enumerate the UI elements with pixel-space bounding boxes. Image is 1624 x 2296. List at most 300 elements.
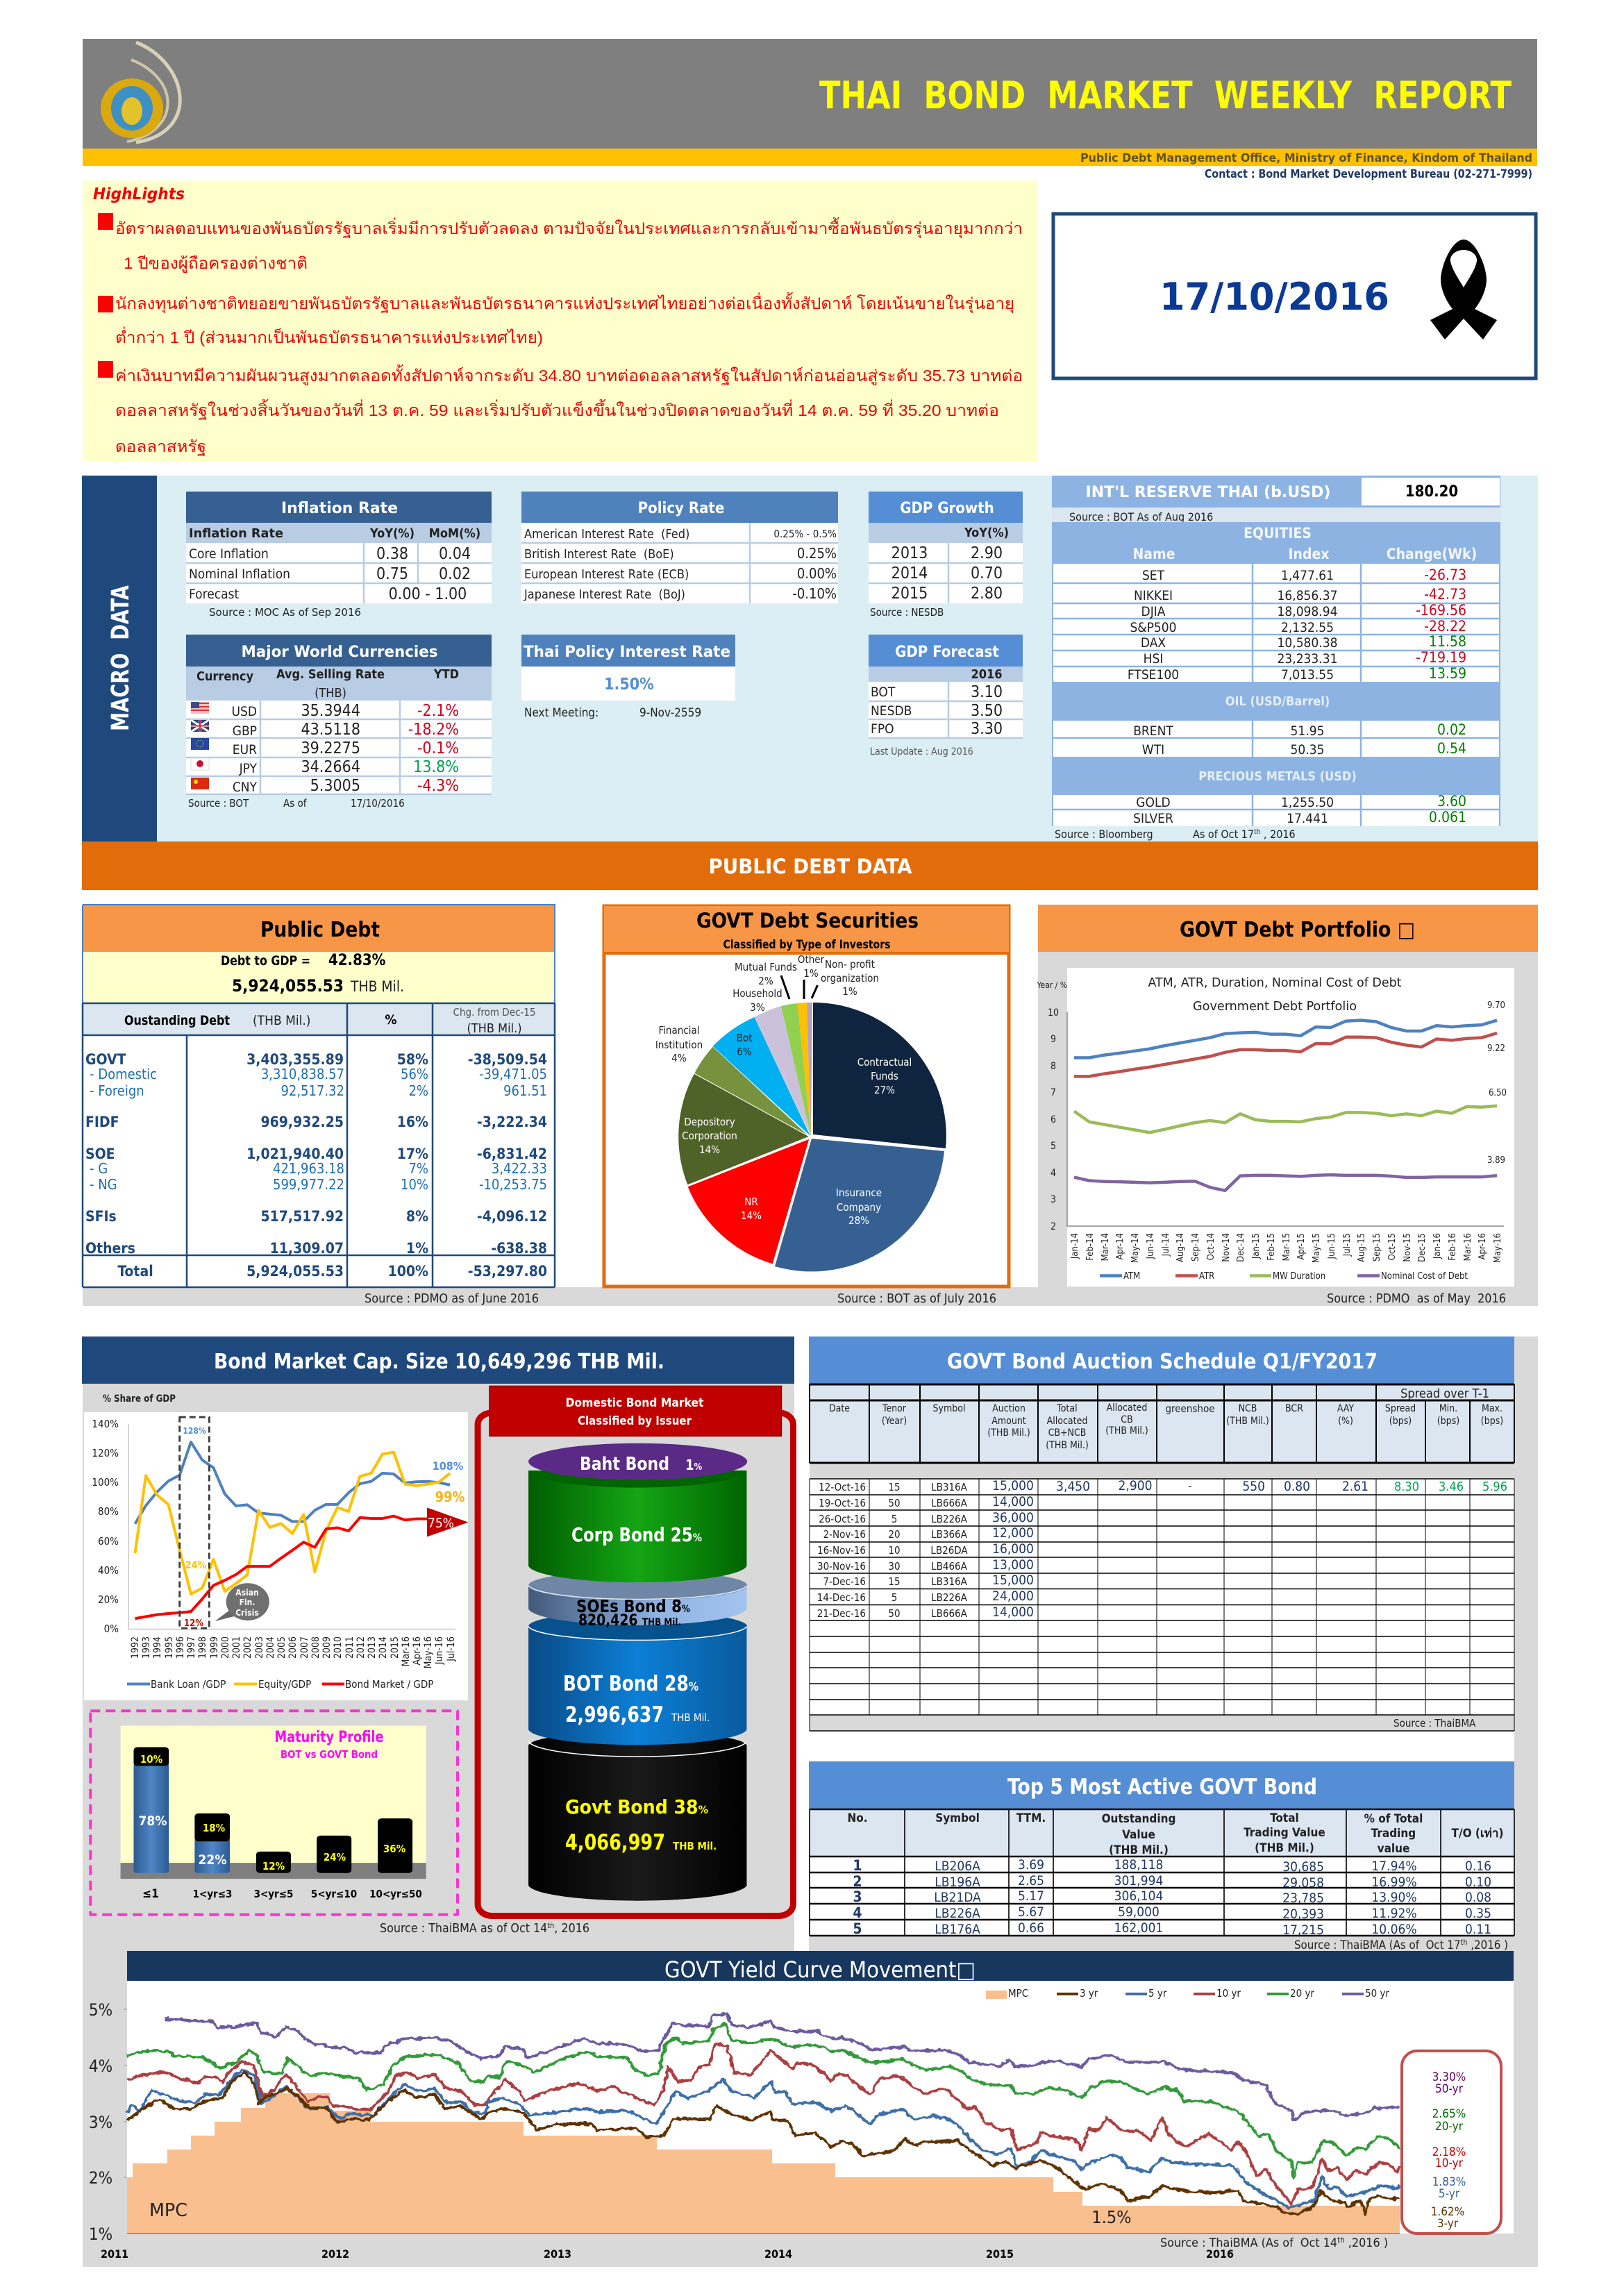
table header: (THB Mil.) [1105, 1425, 1148, 1436]
line chart: ATM, ATR, duration, cost of debt: ATM [1123, 1271, 1140, 1282]
line chart: ATM, ATR, duration, cost of debt: Apr-15 [1296, 1233, 1307, 1259]
table rows: -638.38 [491, 1240, 547, 1257]
table header: T/O (เท่า) [1452, 1827, 1503, 1841]
table: equities, oil, metals: -719.19 [1416, 649, 1466, 666]
table: GDP growth: Source : NESDB [870, 606, 944, 619]
table rows: -38,509.54 [468, 1051, 547, 1068]
latest yields callout: 10-yr [1435, 2156, 1464, 2170]
line chart: ATM, ATR, duration, cost of debt: May-14 [1130, 1233, 1141, 1263]
table: equities, oil, metals: 1,477.61 [1281, 568, 1334, 583]
table: policy rate: 0.25% - 0.5% [773, 528, 837, 540]
table header: Trading [1371, 1827, 1416, 1841]
table rows: LB666A [931, 1497, 968, 1509]
table rows: LB226A [935, 1906, 980, 1921]
table: policy rate [521, 492, 838, 603]
panel: domestic bond market by issuer: SOEs Bond 8% [576, 1596, 690, 1616]
line chart: ATM, ATR, duration, cost of debt: 3.89 [1487, 1155, 1505, 1166]
line chart: share of GDP: 20% [98, 1593, 119, 1606]
panel: domestic bond market by issuer: Classified by Issuer [578, 1414, 692, 1428]
line chart: share of GDP: 24% [185, 1560, 206, 1571]
table: equities, oil, metals: 0.061 [1429, 809, 1466, 826]
table: inflation rate: Core Inflation [189, 546, 269, 562]
table: policy rate: Policy Rate [638, 500, 724, 517]
line chart: share of GDP: Equity/GDP [258, 1678, 311, 1691]
table rows: 3,422.33 [492, 1160, 547, 1177]
line chart: ATM, ATR, duration, cost of debt: Oct-15 [1387, 1233, 1398, 1260]
chart legend: 10 yr [1216, 1987, 1241, 2000]
table rows: 16-Nov-16 [817, 1544, 866, 1557]
line chart: share of GDP: 2006 [287, 1636, 299, 1659]
line chart: ATM, ATR, duration, cost of debt: 7 [1050, 1087, 1056, 1098]
table header: Symbol [933, 1403, 965, 1414]
table: equities, oil, metals: 18,098.94 [1278, 604, 1337, 619]
line chart: share of GDP: 2003 [254, 1636, 265, 1659]
line chart: ATM, ATR, duration, cost of debt: 10 [1048, 1007, 1059, 1019]
table rows: 0.10 [1465, 1875, 1491, 1890]
line chart: share of GDP: 1993 [141, 1636, 152, 1659]
chart legend: 3 yr [1080, 1987, 1098, 2000]
table rows: LB666A [931, 1607, 968, 1620]
highlight bullet 3: ดอลลาสหรัฐในช่วงสิ้นวันของวันที่ 13 ต.ค. 59 และเริ่มปรับตัวแข็งขึ้นในช่วงปิดตลาดของวันที่ 14 ต.ค. 59 ที่ 35.20 บาทต่อ [115, 399, 999, 420]
debt to GDP ratio: Debt to GDP = [221, 953, 310, 969]
line chart: share of GDP: 1999 [209, 1636, 220, 1659]
pie chart: Funds [871, 1070, 898, 1082]
table header: Min. [1439, 1403, 1457, 1414]
report header banner [83, 39, 1537, 181]
table header: (bps) [1481, 1416, 1503, 1427]
yield line chart: 2014 [764, 2247, 792, 2261]
table: GDP forecast: 3.30 [971, 720, 1003, 738]
table rows: 8.30 [1394, 1480, 1419, 1494]
table rows: 2 [853, 1873, 862, 1890]
table: policy rate: -0.10% [792, 585, 837, 602]
contact line: Contact : Bond Market Development Bureau (02-271-7999) [1205, 167, 1532, 181]
table rows: 11,309.07 [270, 1240, 344, 1257]
panel: international reserve: INT'L RESERVE THAI (b.USD) [1086, 484, 1330, 501]
table header: (THB Mil.) [1109, 1843, 1169, 1857]
line chart: share of GDP: 80% [98, 1505, 119, 1518]
icon: ministry logo [101, 42, 180, 142]
table rows: -6,831.42 [477, 1146, 547, 1162]
table: major world currencies: 35.3944 [301, 702, 360, 720]
yield line chart: 2011 [101, 2247, 128, 2261]
yield line chart: 4% [89, 2056, 112, 2076]
table: inflation rate: Inflation Rate [281, 500, 398, 517]
line chart: share of GDP: 140% [92, 1418, 119, 1430]
table rows: 58% [397, 1051, 428, 1068]
line chart: ATM, ATR, duration, cost of debt: Sep-14 [1191, 1233, 1201, 1262]
table: policy rate: 0.00% [797, 565, 837, 582]
latest yields callout: 3-yr [1437, 2217, 1459, 2231]
heading: Public Debt [260, 918, 380, 942]
table header: Max. [1482, 1403, 1502, 1414]
table header: No. [847, 1811, 868, 1825]
table rows: 0.35 [1465, 1906, 1491, 1921]
highlight bullet 3: ดอลลาสหรัฐ [115, 437, 206, 456]
table: equities, oil, metals: 0.54 [1437, 740, 1466, 757]
table: equities, oil, metals: 2,132.55 [1281, 620, 1334, 635]
table rows: 17% [397, 1146, 428, 1162]
panel: domestic bond market by issuer: THB Mil. [671, 1711, 710, 1724]
source note: , 2016 [554, 1921, 589, 1936]
line chart: ATM, ATR, duration, cost of debt: Jun-15 [1327, 1233, 1337, 1259]
table rows: 1,021,940.40 [246, 1146, 344, 1162]
table header: value [1378, 1842, 1409, 1856]
table: equities, oil, metals: PRECIOUS METALS (USD) [1198, 769, 1357, 784]
table rows: 100% [388, 1263, 428, 1280]
total debt: 5,924,055.53 [232, 976, 344, 996]
pie chart: 4% [671, 1052, 687, 1064]
yield line chart: 2015 [986, 2247, 1014, 2261]
table: equities, oil, metals: 3.60 [1437, 793, 1466, 810]
source note: Source : PDMO as of May 2016 [1327, 1291, 1506, 1306]
line chart: ATM, ATR, duration, cost of debt: Nov-14 [1221, 1233, 1232, 1262]
panel: bond market cap: % Share of GDP [103, 1393, 176, 1405]
line chart: ATM, ATR, duration, cost of debt: 3 [1050, 1194, 1056, 1205]
table: GDP growth: 2013 [891, 544, 928, 562]
table rows: 30 [888, 1560, 901, 1573]
source note: Source : ThaiBMA [1393, 1717, 1476, 1729]
panel: govt debt securities pie [603, 906, 1010, 1306]
heading: GOVT Debt Securities [696, 909, 919, 932]
table rows: -39,471.05 [479, 1066, 547, 1082]
line chart: ATM, ATR, duration, cost of debt: MW Duration [1273, 1271, 1325, 1282]
line chart: share of GDP: 2000 [220, 1636, 231, 1659]
line chart: share of GDP [84, 1412, 469, 1700]
yield line chart: 1.5% [1091, 2207, 1132, 2227]
table: equities, oil, metals: 11.58 [1429, 633, 1466, 650]
table rows: FIDF [85, 1114, 119, 1130]
line chart: ATM, ATR, duration, cost of debt: Aug-15 [1357, 1233, 1367, 1262]
table: major world currencies: 34.2664 [301, 758, 360, 776]
table header: (THB Mil.) [1046, 1440, 1089, 1451]
table header: (THB Mil.) [1226, 1416, 1269, 1427]
table: equities, oil, metals: 1,255.50 [1281, 795, 1334, 810]
table: equities, oil, metals: Source : Bloomberg [1055, 828, 1153, 841]
line chart: share of GDP: 2014 [378, 1636, 389, 1659]
table rows: 14,000 [992, 1604, 1034, 1620]
table: GDP growth: 2015 [891, 585, 928, 603]
table: inflation rate: 0.38 [376, 545, 408, 563]
table: equities, oil, metals: 50.35 [1291, 742, 1324, 757]
date: 17/10/2016 [1160, 275, 1389, 319]
table rows: 15,000 [992, 1478, 1034, 1493]
table: equities, oil, metals: BRENT [1133, 723, 1173, 739]
pie chart: Institution [655, 1039, 703, 1051]
subheading: Classified by Type of Investors [723, 938, 890, 952]
line chart: share of GDP: 60% [98, 1535, 119, 1548]
yield line chart: 2% [89, 2168, 112, 2188]
table rows: LB176A [935, 1922, 980, 1937]
line chart: share of GDP: 128% [183, 1426, 206, 1436]
chart legend: 5 yr [1148, 1987, 1167, 2000]
line chart: share of GDP: Bond Market / GDP [345, 1678, 433, 1691]
table: GDP forecast: BOT [871, 685, 896, 700]
panel: Thai policy interest rate: Thai Policy Interest Rate [524, 644, 730, 661]
table rows [85, 1051, 547, 1280]
table rows: 550 [1242, 1479, 1265, 1494]
line chart: ATM, ATR, duration, cost of debt: ATR [1199, 1271, 1214, 1282]
icon: black mourning ribbon [1430, 240, 1497, 340]
panel: top 5 most active bonds [809, 1761, 1514, 1952]
public debt data banner: PUBLIC DEBT DATA [708, 855, 912, 878]
table rows: Others [85, 1240, 135, 1257]
panel: maturity profile: 22% [199, 1852, 226, 1868]
table: GDP forecast: 3.10 [971, 683, 1003, 701]
table header: NCB [1239, 1403, 1257, 1414]
table rows: 17,215 [1282, 1922, 1324, 1938]
line chart: share of GDP: 1995 [164, 1636, 175, 1659]
line chart: share of GDP: 2015 [390, 1636, 401, 1659]
pie chart: Insurance [836, 1187, 882, 1199]
yield line chart: MPC [149, 2200, 187, 2221]
table: inflation rate: 0.04 [439, 545, 471, 563]
table rows: 20 [888, 1528, 901, 1541]
table rows: LB26DA [930, 1544, 968, 1557]
pie chart: Mutual Funds [735, 961, 797, 973]
table rows: 3 [853, 1888, 862, 1905]
line chart: ATM, ATR, duration, cost of debt: Feb-16 [1448, 1233, 1458, 1261]
table: GDP growth: 2014 [891, 564, 928, 583]
line chart: ATM, ATR, duration, cost of debt [1037, 975, 1507, 1282]
table rows: 2% [408, 1082, 428, 1099]
pie chart: Financial [658, 1024, 700, 1037]
panel: maturity profile [90, 1711, 458, 1915]
table: major world currencies: GBP [233, 723, 257, 739]
panel: maturity profile: 1<yr≤3 [193, 1888, 232, 1900]
table: GDP forecast: NESDB [871, 703, 912, 719]
line chart: ATM, ATR, duration, cost of debt: Dec-15 [1417, 1233, 1428, 1262]
table header: (THB Mil.) [253, 1013, 310, 1028]
table: major world currencies: -18.2% [408, 721, 459, 739]
line chart: share of GDP: 1998 [197, 1636, 208, 1659]
table: equities, oil, metals: FTSE100 [1128, 667, 1179, 682]
table header [847, 1811, 1503, 1857]
line chart: ATM, ATR, duration, cost of debt: Government Debt Portfolio [1193, 999, 1357, 1014]
line chart: share of GDP: 2012 [355, 1636, 367, 1659]
table rows: 517,517.92 [260, 1208, 344, 1225]
table: GDP growth: 2.80 [971, 585, 1003, 603]
table rows: 7-Dec-16 [823, 1575, 866, 1588]
heading: GOVT Debt Portfolio □ [1180, 918, 1415, 942]
line chart: ATM, ATR, duration, cost of debt: Nov-15 [1403, 1233, 1413, 1262]
table: inflation rate: 0.02 [439, 565, 471, 583]
icon: USA flag [191, 702, 209, 714]
table: equities, oil, metals: , 2016 [1260, 828, 1296, 841]
highlight bullet 1: อัตราผลตอบแทนของพันธบัตรรัฐบาลเริ่มมีการปรับตัวลดลง ตามปัจจัยในประเทศและการกลับเข้ามาซื้อพันธบัตรรุ่นอายุมากกว่า [115, 217, 1023, 238]
table: equities, oil, metals: -28.22 [1424, 618, 1466, 635]
pie chart [655, 953, 946, 1271]
table: equities, oil, metals [1052, 522, 1500, 841]
table header: Date [829, 1403, 850, 1414]
table: policy rate: European Interest Rate (ECB) [524, 567, 689, 582]
table: equities, oil, metals: 10,580.38 [1278, 635, 1337, 651]
source note: ,2016 ) [1345, 2236, 1388, 2250]
table rows: 14,000 [992, 1494, 1034, 1509]
table: inflation rate [186, 492, 492, 619]
source strip [83, 1287, 1538, 1306]
table rows: 5.96 [1482, 1480, 1507, 1494]
table rows: 20,393 [1282, 1907, 1324, 1922]
table: policy rate: 0.25% [797, 545, 837, 562]
heading: GOVT Bond Auction Schedule Q1/FY2017 [947, 1350, 1378, 1374]
panel: international reserve: Source : BOT As of Aug 2016 [1069, 510, 1213, 523]
table: policy rate: American Interest Rate (Fed) [524, 527, 689, 542]
pie chart: 2% [758, 975, 773, 987]
table rows: 29,058 [1282, 1875, 1324, 1891]
line chart: ATM, ATR, duration, cost of debt: ATM, ATR, Duration, Nominal Cost of Debt [1148, 975, 1401, 990]
table rows: -4,096.12 [477, 1208, 547, 1225]
table rows: 969,932.25 [260, 1114, 344, 1130]
line chart: share of GDP: Mar-16 [401, 1636, 412, 1666]
table rows: - Foreign [90, 1082, 144, 1099]
line chart: ATM, ATR, duration, cost of debt: Jan-15 [1251, 1233, 1262, 1259]
table rows [817, 1478, 1507, 1620]
source note: ,2016 ) [1468, 1938, 1508, 1952]
table rows: 5.67 [1018, 1904, 1044, 1920]
table: equities, oil, metals: 16,856.37 [1278, 588, 1337, 603]
line chart: share of GDP: 120% [92, 1447, 119, 1459]
table header: (THB Mil.) [467, 1021, 522, 1036]
pie chart: 27% [874, 1084, 895, 1096]
yield line chart: 2013 [544, 2247, 571, 2261]
panel: international reserve [1052, 476, 1500, 523]
line chart: share of GDP: 75% [428, 1516, 454, 1531]
latest yields callout: 20-yr [1435, 2120, 1464, 2134]
table header: (THB Mil.) [987, 1427, 1030, 1439]
table: major world currencies: Major World Currencies [242, 644, 437, 661]
table rows: 5.17 [1018, 1888, 1044, 1904]
table rows: 16.99% [1371, 1875, 1417, 1890]
panel: maturity profile: ≤1 [142, 1887, 159, 1901]
line chart: share of GDP: 99% [435, 1489, 465, 1505]
table rows: 36,000 [992, 1510, 1034, 1525]
panel: domestic bond market by issuer: Govt Bond 38% [565, 1795, 708, 1818]
table: GDP forecast: Last Update : Aug 2016 [870, 746, 973, 757]
line chart: ATM, ATR, duration, cost of debt: Aug-14 [1175, 1233, 1186, 1262]
table rows: 0.80 [1284, 1479, 1310, 1494]
table: major world currencies: -2.1% [417, 702, 459, 720]
table rows: 16% [397, 1114, 428, 1130]
line chart: ATM, ATR, duration, cost of debt: Apr-16 [1477, 1233, 1488, 1259]
table rows: 30-Nov-16 [817, 1560, 866, 1573]
table rows: LB21DA [934, 1890, 981, 1905]
panel: domestic bond market by issuer: Baht Bond [580, 1454, 669, 1475]
latest yields callout: 5-yr [1439, 2187, 1460, 2201]
table: equities, oil, metals: EQUITIES [1244, 525, 1312, 542]
table header: (bps) [1389, 1416, 1412, 1427]
table: major world currencies [186, 635, 492, 810]
line chart: share of GDP: 2004 [265, 1636, 276, 1659]
table rows: 162,001 [1114, 1920, 1163, 1936]
table: GDP forecast: 2016 [971, 667, 1003, 682]
table: major world currencies: 43.5118 [301, 721, 360, 739]
line chart: share of GDP: 2007 [299, 1636, 310, 1659]
line chart: share of GDP: 1996 [175, 1636, 186, 1659]
line chart: share of GDP: 2010 [333, 1636, 344, 1659]
table header: Chg. from Dec-15 [453, 1006, 535, 1019]
line chart: share of GDP: 2005 [276, 1636, 287, 1659]
table: GDP forecast: FPO [871, 721, 894, 737]
table: GDP growth: YoY(%) [964, 526, 1009, 540]
table rows: Total [117, 1263, 153, 1280]
line chart: ATM, ATR, duration, cost of debt: 6 [1050, 1114, 1056, 1125]
table: equities, oil, metals: HSI [1144, 651, 1163, 667]
chart legend: MPC [1008, 1987, 1028, 2000]
table rows: 10% [401, 1176, 428, 1193]
table rows: LB316A [931, 1481, 968, 1493]
line chart: share of GDP: Asian [235, 1588, 259, 1598]
panel: domestic bond market by issuer [478, 1386, 793, 1916]
line chart: share of GDP: 12% [184, 1618, 203, 1629]
panel: Thai policy interest rate [521, 635, 735, 720]
table: major world currencies: 13.8% [413, 758, 459, 776]
panel: maturity profile: 10% [140, 1753, 163, 1766]
highlight bullet 3: ค่าเงินบาทมีความผันผวนสูงมากตลอดทั้งสัปดาห์จากระดับ 34.80 บาทต่อดอลลาสหรัฐในสัปดาห์ก่อนอ่อนสู่ระดับ 35.73 บาทต่อ [115, 364, 1023, 385]
table rows: 50 [888, 1607, 901, 1620]
table rows: 2.61 [1342, 1479, 1368, 1494]
line chart: ATM, ATR, duration, cost of debt: 8 [1050, 1061, 1056, 1072]
line chart: ATM, ATR, duration, cost of debt: Apr-14 [1115, 1233, 1125, 1259]
table: major world currencies: YTD [433, 667, 459, 682]
table rows: 11.92% [1371, 1906, 1417, 1921]
pie chart: 14% [741, 1209, 762, 1222]
table rows: 0.16 [1465, 1859, 1491, 1874]
line chart: share of GDP: 2008 [310, 1636, 321, 1659]
table rows: 14-Dec-16 [817, 1591, 866, 1604]
source note: Source : ThaiBMA (As of Oct 14 [1160, 2236, 1329, 2250]
latest yields callout: 2.65% [1432, 2107, 1466, 2121]
table rows: 8% [406, 1208, 428, 1225]
table: inflation rate: Forecast [189, 587, 240, 602]
yield line chart: 2012 [321, 2247, 349, 2261]
table: major world currencies: -0.1% [417, 739, 459, 757]
table: inflation rate: Inflation Rate [189, 526, 283, 541]
latest yields callout: 50-yr [1435, 2082, 1464, 2096]
table header: Auction [992, 1403, 1026, 1414]
table rows: 1 [853, 1857, 862, 1874]
table: inflation rate: Nominal Inflation [189, 567, 290, 582]
table rows: 21-Dec-16 [817, 1607, 866, 1620]
panel: bond market cap [82, 1336, 794, 1951]
table: inflation rate: Source : MOC As of Sep 2016 [209, 606, 361, 619]
policy rate area [127, 2093, 1400, 2234]
pie chart: NR [744, 1196, 758, 1208]
line chart: ATM, ATR, duration, cost of debt: Mar-16 [1463, 1233, 1473, 1261]
table rows: 306,104 [1114, 1888, 1163, 1904]
line chart: share of GDP: Jul-16 [446, 1636, 457, 1662]
panel: domestic bond market by issuer: Corp Bond 25% [571, 1523, 702, 1546]
table header: CB [1121, 1414, 1133, 1425]
table: major world currencies: As of [283, 797, 308, 810]
line chart: share of GDP: Fin. [240, 1598, 255, 1607]
panel: maturity profile: 24% [324, 1851, 346, 1863]
table rows: 19-Oct-16 [819, 1497, 866, 1509]
line chart: ATM, ATR, duration, cost of debt: 9 [1050, 1034, 1056, 1045]
table: major world currencies: CNY [233, 780, 258, 795]
panel: maturity profile: 5<yr≤10 [311, 1888, 357, 1900]
line chart: ATM, ATR, duration, cost of debt: Sep-15 [1372, 1233, 1382, 1262]
line chart: ATM, ATR, duration, cost of debt: Mar-14 [1100, 1233, 1111, 1261]
table: equities, oil, metals: GOLD [1136, 795, 1171, 810]
table header: Allocated [1107, 1402, 1147, 1414]
table rows: 50 [888, 1497, 901, 1509]
source note: Source : BOT as of July 2016 [837, 1291, 996, 1306]
table: major world currencies: EUR [233, 742, 257, 757]
highlight bullet 1 [98, 213, 1023, 273]
panel: international reserve: 180.20 [1405, 483, 1458, 501]
line chart: ATM, ATR, duration, cost of debt: Jan-14 [1070, 1233, 1080, 1259]
